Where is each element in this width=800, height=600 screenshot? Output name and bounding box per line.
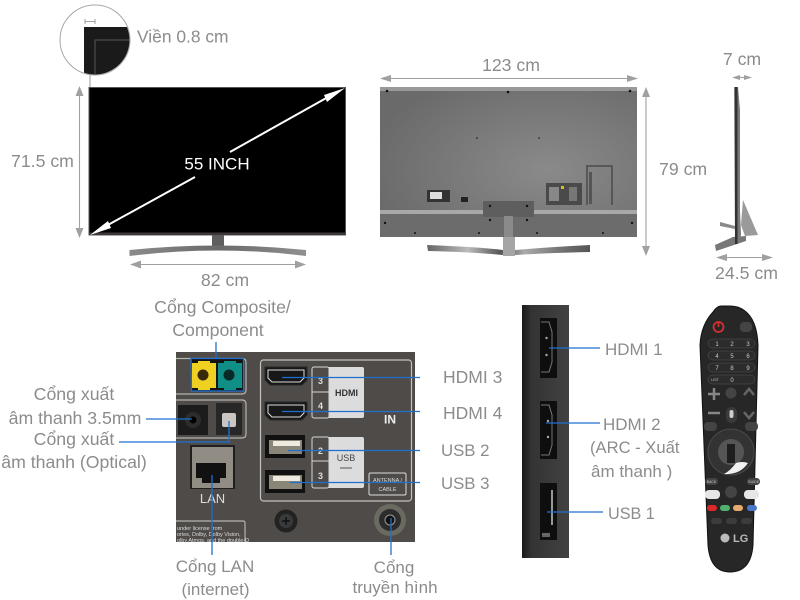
label: composite/component: Component xyxy=(172,320,264,340)
label: antenna xyxy=(352,518,438,597)
number keys: LIST xyxy=(711,378,720,382)
label: HDMI 1 xyxy=(549,340,663,359)
label: USB 1 xyxy=(547,505,655,523)
IN group xyxy=(260,360,412,501)
HDMI label plate xyxy=(312,367,364,418)
label: composite/component xyxy=(154,297,291,391)
base dimension: 24.5 cm xyxy=(715,254,778,283)
label: LAN: (internet) xyxy=(181,580,250,599)
wheel xyxy=(708,429,754,475)
label: audio 3.5mm xyxy=(9,384,192,428)
base dimension: 24.5 cm: 24.5 cm xyxy=(715,263,778,283)
label: HDMI 2 xyxy=(546,415,680,481)
number keys: 3 xyxy=(746,342,750,348)
number keys: 7 xyxy=(715,366,719,372)
depth dimension: 7 cm: 7 cm xyxy=(723,49,761,69)
USB label plate: USB xyxy=(337,453,355,463)
height dimension: 79 cm xyxy=(642,87,707,256)
label: HDMI 1: HDMI 1 xyxy=(605,340,663,359)
USB label plate xyxy=(312,437,364,488)
label: optical xyxy=(1,421,229,472)
screw xyxy=(274,510,298,532)
antenna label xyxy=(369,473,406,495)
side ports panel xyxy=(522,305,569,558)
colour and app buttons xyxy=(705,478,760,524)
number keys: 9 xyxy=(746,366,750,372)
rear port panel xyxy=(176,352,415,544)
HDMI label plate: HDMI xyxy=(335,388,358,398)
volume and channel xyxy=(704,388,758,431)
antenna label: ANTENNA / xyxy=(373,478,402,484)
back view TV xyxy=(380,87,637,256)
USB label plate: 3 xyxy=(318,471,323,481)
label: HDMI 2: HDMI 2 xyxy=(603,415,661,434)
USB label plate: 2 xyxy=(318,446,323,456)
label: HDMI 4: HDMI 4 xyxy=(443,403,503,423)
label: LAN xyxy=(176,475,254,599)
license plate xyxy=(176,521,249,544)
side view TV xyxy=(715,87,758,251)
HDMI label plate: 4 xyxy=(318,401,323,411)
label: HDMI 2: âm thanh ) xyxy=(591,462,672,481)
colour and app buttons: GUIDE xyxy=(748,480,760,484)
width dimension: 123 cm: 123 cm xyxy=(482,55,540,75)
LG logo: LG xyxy=(733,533,748,545)
license plate: olby Atmos, and the double-D xyxy=(177,538,249,544)
label: HDMI 2: (ARC - Xuất xyxy=(590,438,680,457)
label: USB 1: USB 1 xyxy=(608,505,655,523)
height dimension: 79 cm: 79 cm xyxy=(659,159,707,179)
width dimension: 123 cm xyxy=(380,55,638,82)
depth dimension: 7 cm xyxy=(723,49,761,80)
label: HDMI 3: HDMI 3 xyxy=(443,367,502,387)
license plate: ories, Dolby, Dolby Vision, xyxy=(177,532,241,538)
front view TV xyxy=(89,88,346,256)
number keys: 4 xyxy=(715,354,719,360)
label: USB 3: USB 3 xyxy=(441,474,490,493)
label: optical: âm thanh (Optical) xyxy=(1,452,147,472)
label: LAN: Cổng LAN xyxy=(176,557,254,576)
label: composite/component: Cổng Composite/ xyxy=(154,297,291,317)
label: audio 3.5mm: Cổng xuất xyxy=(34,384,114,404)
number keys: 1 xyxy=(715,342,719,348)
IN group: IN xyxy=(384,412,396,426)
label: 55 inch: 55 INCH xyxy=(184,154,250,174)
remote control xyxy=(700,306,760,572)
label: audio 3.5mm: âm thanh 3.5mm xyxy=(9,408,141,428)
height dimension: 71.5 cm: 71.5 cm xyxy=(11,151,74,171)
label: antenna: Cổng xyxy=(374,558,414,577)
number keys: 6 xyxy=(746,354,750,360)
width dimension: 82 cm xyxy=(130,260,306,290)
number keys xyxy=(708,339,755,384)
audio ports xyxy=(176,400,246,438)
diagonal size arrow xyxy=(90,88,345,235)
label: bezel: Viền 0.8 cm xyxy=(137,26,229,46)
license plate: under license from xyxy=(177,526,223,532)
power button xyxy=(714,321,724,332)
number keys: 2 xyxy=(730,342,734,348)
label: antenna: truyền hình xyxy=(352,578,438,597)
LAN port xyxy=(190,445,235,506)
label: optical: Cổng xuất xyxy=(34,429,114,449)
antenna port xyxy=(374,504,406,536)
LAN port: LAN xyxy=(200,491,225,506)
number keys: 5 xyxy=(730,354,734,360)
number keys: 8 xyxy=(730,366,734,372)
HDMI label plate: 3 xyxy=(318,376,323,386)
composite ports xyxy=(176,358,246,394)
antenna label: CABLE xyxy=(378,487,397,493)
LG logo xyxy=(720,533,748,545)
icon: bezel detail circle xyxy=(60,5,134,87)
label: USB 2: USB 2 xyxy=(441,441,490,460)
number keys: 0 xyxy=(730,378,734,384)
width dimension: 82 cm: 82 cm xyxy=(201,270,249,290)
colour and app buttons: BACK xyxy=(707,480,717,484)
height dimension: 71.5 cm xyxy=(11,86,84,238)
